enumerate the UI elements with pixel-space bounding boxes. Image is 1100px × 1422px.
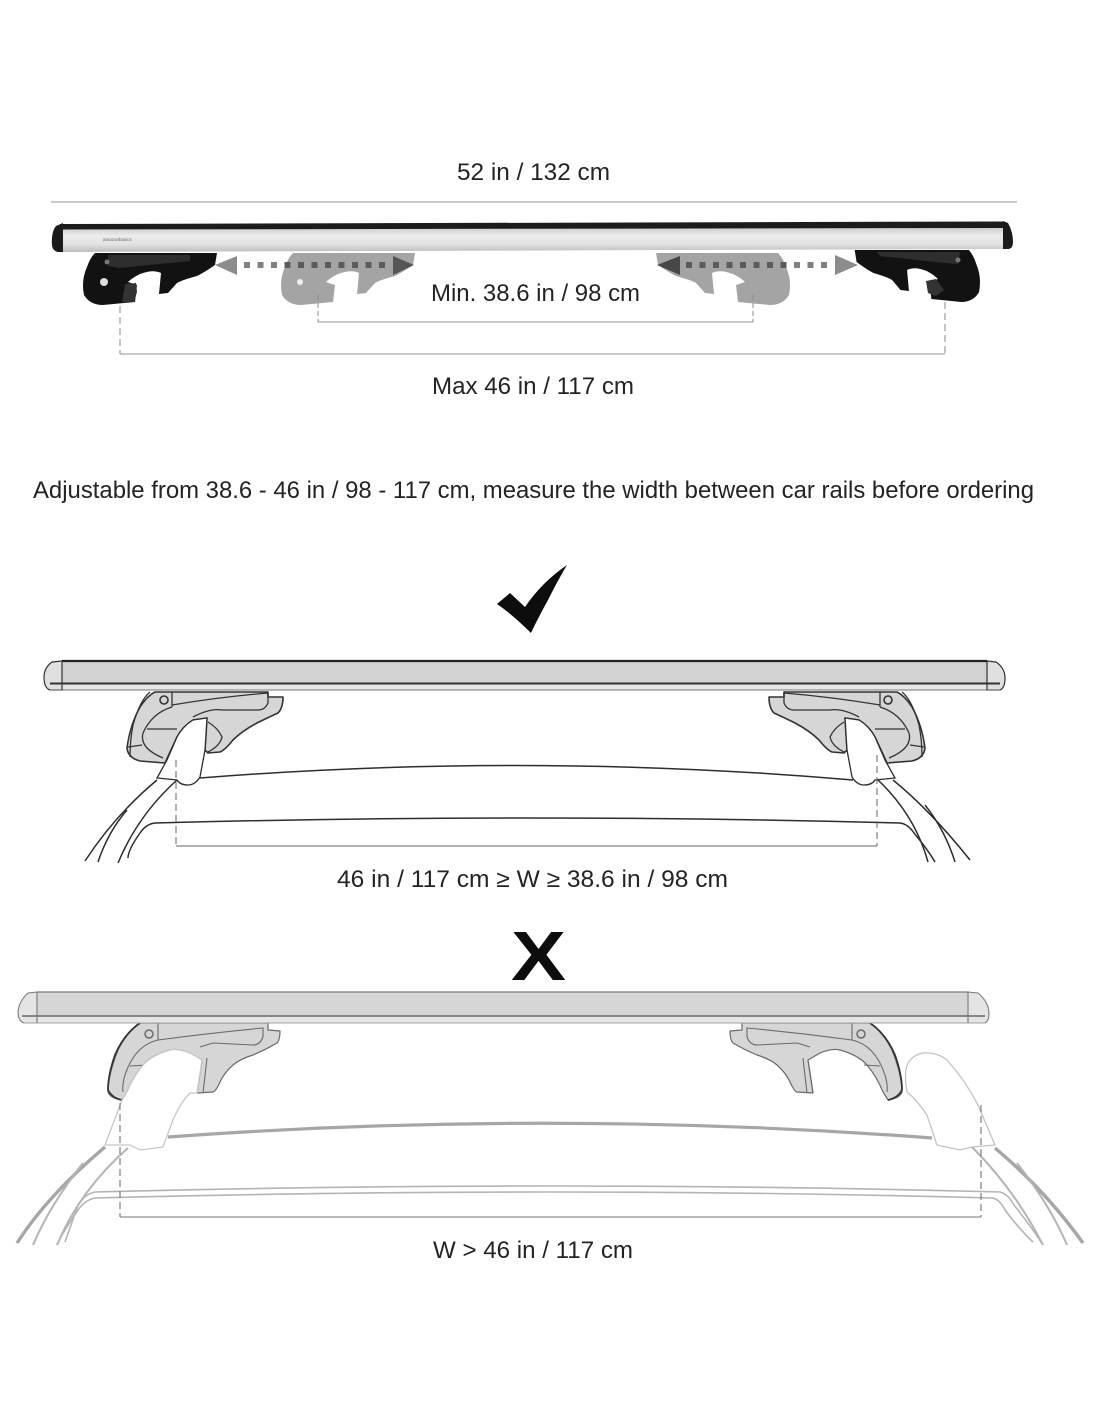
right rail block <box>906 1053 995 1150</box>
too wide label: W > 46 in / 117 cm <box>433 1237 633 1264</box>
dimension: overall length: 52 in / 132 cm <box>457 159 610 186</box>
right foot <box>769 692 925 763</box>
roof bar <box>18 992 989 1023</box>
instruction text: Adjustable from 38.6 - 46 in / 98 - 117 cm, measure the width between car rails before ordering <box>33 477 1034 504</box>
dimension: maximum spacing: Max 46 in / 117 cm <box>432 373 634 400</box>
roof bar: amazonbasics <box>103 237 133 242</box>
ghost foot: left minimum position <box>281 253 415 305</box>
roof bar <box>52 221 1013 252</box>
panel: photo of roof bar with adjustable feet <box>51 159 1017 400</box>
black foot: right <box>855 250 980 302</box>
car roof and rails <box>85 765 970 863</box>
right foot <box>730 1023 902 1100</box>
right rail block <box>845 718 895 785</box>
left foot <box>127 692 283 763</box>
dimension: maximum spacing <box>120 302 945 400</box>
dimension: minimum spacing: Min. 38.6 in / 98 cm <box>431 280 640 307</box>
fit range label: 46 in / 117 cm ≥ W ≥ 38.6 in / 98 cm <box>337 866 728 893</box>
icon: cross mark: X <box>511 917 566 995</box>
panel: correct fit diagram <box>44 661 1005 893</box>
left rail block <box>157 718 207 785</box>
roof bar <box>44 661 1005 690</box>
black foot: left <box>83 253 217 305</box>
car roof and rails <box>17 1123 1083 1245</box>
ghost foot: right minimum position <box>656 253 790 305</box>
arrow: left foot adjustment <box>215 256 414 275</box>
arrow: right foot adjustment <box>657 255 858 275</box>
left rail block <box>105 1049 202 1150</box>
dimension line <box>176 755 877 846</box>
dimension: minimum spacing <box>318 280 753 322</box>
dimension line <box>120 1103 981 1217</box>
panel: incorrect fit diagram <box>17 992 1083 1264</box>
icon: check mark <box>497 565 567 633</box>
left foot <box>108 1023 280 1100</box>
